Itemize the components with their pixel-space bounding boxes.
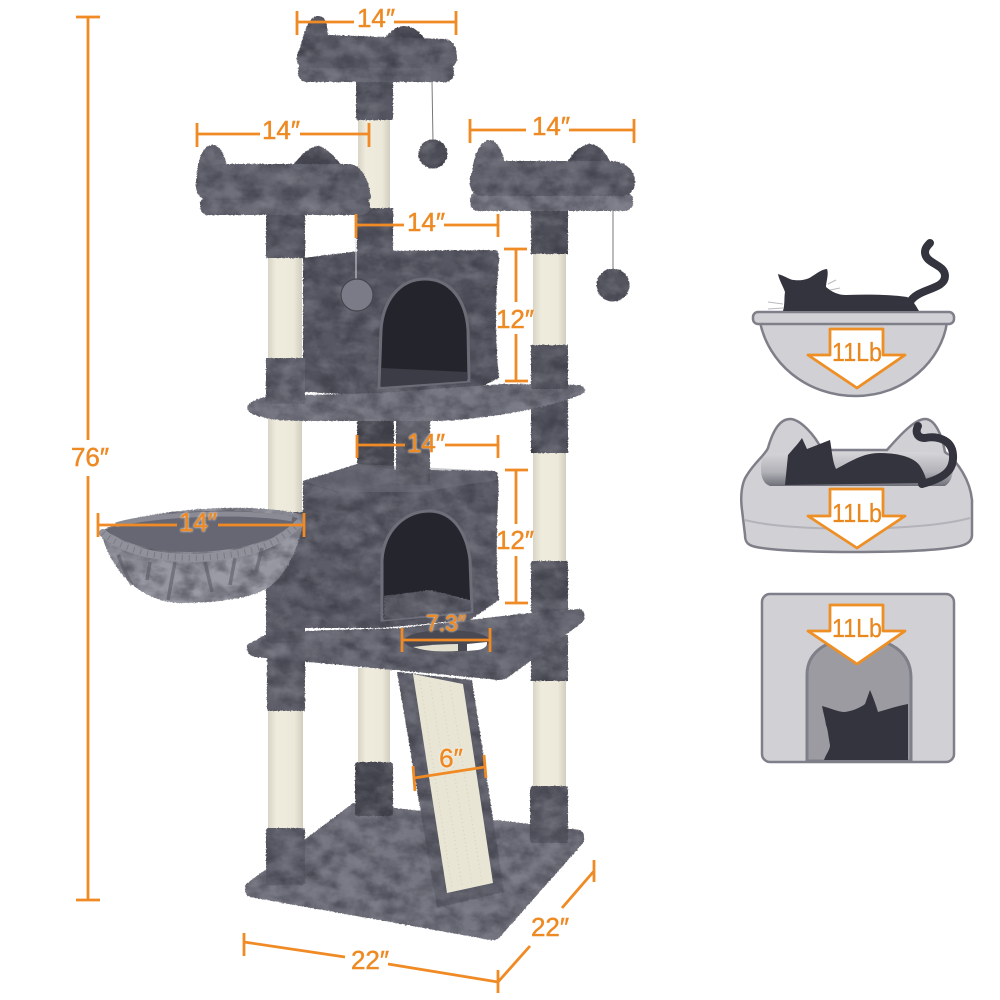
dimension: upper condo width: 14″ xyxy=(407,207,445,237)
cat silhouette xyxy=(822,690,908,760)
hole sisal sliver xyxy=(413,644,458,652)
cat silhouette xyxy=(785,426,953,485)
icon: cat on perch holding 11 lb xyxy=(753,243,954,396)
lower condo xyxy=(303,440,499,628)
bed inner xyxy=(761,452,953,486)
right lower post xyxy=(530,635,568,843)
right perch xyxy=(470,140,635,211)
load arrow xyxy=(808,329,905,388)
load label: 11Lb xyxy=(832,498,882,528)
pompom toy: right xyxy=(596,210,630,302)
upper condo door xyxy=(379,279,469,388)
dimension: ramp width xyxy=(413,743,486,791)
left perch xyxy=(196,145,371,215)
load arrow xyxy=(808,605,905,664)
dimension: platform hole width: 7.3″ xyxy=(426,610,466,636)
perch bowl xyxy=(760,322,947,396)
dimension: upper condo height: 12″ xyxy=(496,304,534,334)
platform two xyxy=(247,609,584,680)
icon: cat in condo holding 11 lb xyxy=(762,594,954,762)
hanging basket xyxy=(101,508,304,603)
dimension: total height 76 inches: 76″ xyxy=(71,442,109,472)
dimension: right perch width: 14″ xyxy=(532,111,570,141)
dimension: lower condo height xyxy=(496,470,534,603)
dimension: lower condo height: 12″ xyxy=(496,525,534,555)
dimension: platform hole width xyxy=(402,610,490,652)
hole white sliver xyxy=(467,642,487,651)
dimension: ramp width: 6″ xyxy=(439,743,463,773)
top perch xyxy=(297,16,457,82)
bed xyxy=(741,419,972,552)
dimension: left perch width: 14″ xyxy=(262,115,300,145)
dimension: base width: 22″ xyxy=(351,945,389,975)
load arrow xyxy=(808,489,905,548)
upper condo floor xyxy=(381,368,467,387)
left lower post xyxy=(266,655,305,885)
load label: 11Lb xyxy=(832,613,882,643)
platform hole xyxy=(404,630,490,652)
condo panel xyxy=(762,594,954,762)
upper sisal section of back post xyxy=(356,80,393,252)
dimension: upper condo height xyxy=(496,249,534,381)
upper condo xyxy=(303,250,499,396)
post above platform one right xyxy=(531,345,568,389)
pompom toy: middle xyxy=(341,214,373,311)
lower sisal and dark posts between platforms xyxy=(268,400,568,613)
pompom toy: top xyxy=(418,81,448,168)
cat tree xyxy=(101,16,635,940)
dimension: base depth: 22″ xyxy=(531,912,569,942)
back lower post xyxy=(355,668,393,816)
condo door xyxy=(807,638,911,761)
dimension: base depth xyxy=(498,860,594,982)
platform one xyxy=(247,384,585,421)
dimension: top perch width: 14″ xyxy=(357,3,395,33)
perch rim xyxy=(753,312,954,324)
scratching ramp xyxy=(397,672,504,908)
dimension: base width xyxy=(244,933,498,993)
bed seam xyxy=(745,518,970,529)
post above platform one left xyxy=(266,358,305,404)
left post through platform two xyxy=(266,512,305,643)
upper left and right posts xyxy=(266,208,568,360)
icon: cat in bed holding 11 lb xyxy=(741,419,972,552)
load label: 11Lb xyxy=(832,337,882,367)
lower condo door xyxy=(382,511,472,620)
dimension: lower condo width: 14″ xyxy=(407,428,445,458)
cat silhouette xyxy=(768,243,945,311)
lower condo floor xyxy=(384,590,471,620)
dimension: basket width: 14″ xyxy=(179,507,217,537)
base platform xyxy=(245,803,584,940)
